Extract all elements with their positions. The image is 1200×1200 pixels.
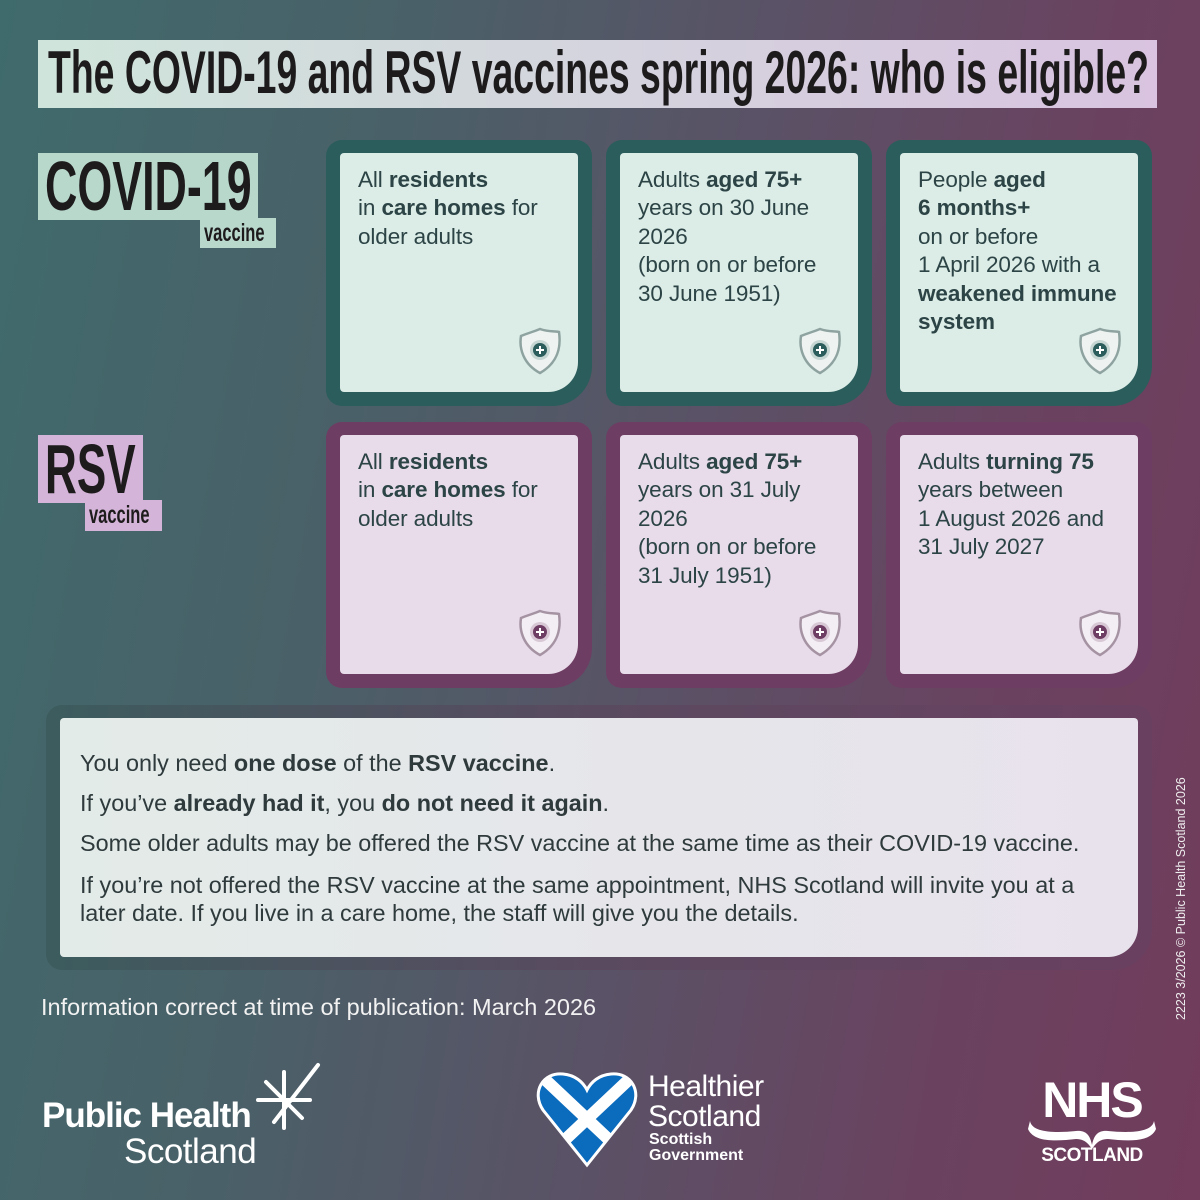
label: RSV vaccine: vaccine [89,501,150,529]
card: rsv turning 75: Adults turning 75 [918,449,1094,474]
footnote: Information correct at time of publication: March 2026 [41,994,596,1020]
icon: shield [1079,610,1121,656]
label: COVID-19 vaccine: COVID-19 [45,147,252,225]
card: covid immune: weakened immune [918,281,1117,306]
card: covid care homes: older adults [358,224,473,249]
label: RSV vaccine: RSV [45,430,136,508]
card: covid 75+: years on 30 June [638,195,809,220]
panel: RSV info: Some older adults may be offered the RSV vaccine at the same time as their COVID-19 vaccine. [80,830,1079,856]
title: The COVID-19 and RSV vaccines spring 2026: who is eligible? [48,40,1149,106]
card: rsv turning 75 [886,422,1152,688]
icon: shield [519,328,561,374]
card: rsv 75+: Adults aged 75+ [638,449,802,474]
label: COVID-19 vaccine [38,147,276,248]
card: rsv care homes: All residents [358,449,488,474]
card: covid care homes: in care homes for [358,195,538,220]
logo: NHS Scotland: NHS [1042,1072,1142,1128]
card: covid care homes [326,140,592,406]
card: covid immune: People aged [918,167,1046,192]
card: rsv 75+: 2026 [638,506,688,531]
card: rsv turning 75: 31 July 2027 [918,534,1044,559]
card: rsv 75+ [606,422,872,688]
icon: shield [1079,328,1121,374]
logo: Healthier Scotland: Government [649,1147,743,1164]
card: rsv turning 75: years between [918,477,1063,502]
card: covid 75+: (born on or before [638,252,816,277]
side code: 2223 3/2026 © Public Health Scotland 2026 [1174,777,1188,1020]
panel: RSV info: If you’ve already had it, you do not need it again. [80,790,609,816]
card: rsv turning 75: 1 August 2026 and [918,506,1104,531]
card: rsv 75+: years on 31 July [638,477,800,502]
card: covid immune: 6 months+ [918,195,1030,220]
logo: Healthier Scotland: Healthier [648,1070,764,1103]
label: COVID-19 vaccine: vaccine [204,219,265,247]
card: covid immune: system [918,309,995,334]
logo: Public Health Scotland: Public Health [42,1096,251,1135]
card: rsv care homes: older adults [358,506,473,531]
logo: NHS Scotland [1028,1072,1156,1166]
icon: shield [799,328,841,374]
logo: Healthier Scotland [536,1070,764,1168]
card: covid 75+: Adults aged 75+ [638,167,802,192]
card: covid immune [886,140,1152,406]
card: covid immune: 1 April 2026 with a [918,252,1100,277]
logo: Healthier Scotland: Scottish [649,1131,712,1148]
card: rsv 75+: 31 July 1951) [638,563,772,588]
icon: shield [799,610,841,656]
card: covid 75+ [606,140,872,406]
card: rsv care homes [326,422,592,688]
icon: shield [519,610,561,656]
logo: Healthier Scotland: Scotland [648,1100,761,1133]
card: covid care homes: All residents [358,167,488,192]
card: covid 75+: 2026 [638,224,688,249]
logo: Public Health Scotland [42,1062,320,1171]
card: covid immune: on or before [918,224,1038,249]
label: RSV vaccine [38,430,162,531]
panel: RSV info: If you’re not offered the RSV vaccine at the same appointment, NHS Scotland will invite you at a later date. If you live in a care home, the staff will give you the details. [80,872,1074,926]
card: rsv 75+: (born on or before [638,534,816,559]
logo: Public Health Scotland: Scotland [124,1132,256,1171]
card: covid 75+: 30 June 1951) [638,281,781,306]
logo: NHS Scotland: SCOTLAND [1041,1145,1143,1166]
panel: RSV info: You only need one dose of the RSV vaccine. [80,750,555,776]
panel: RSV info [46,705,1152,970]
card: rsv care homes: in care homes for [358,477,538,502]
